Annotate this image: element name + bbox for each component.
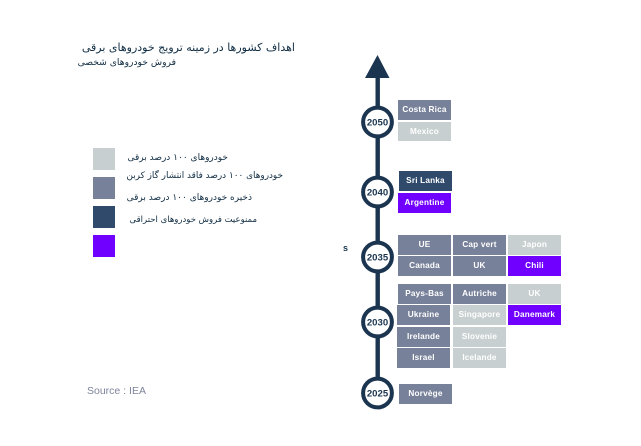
legend swatch: violet: [93, 235, 115, 257]
Ukraine: Ukraine: [408, 310, 439, 319]
Autriche: [453, 284, 506, 304]
milestone 2035: 2035: [367, 252, 389, 264]
Israel: [397, 348, 450, 368]
Israel: Israel: [412, 353, 435, 362]
milestone 2040: [363, 178, 392, 206]
Norvège: Norvège: [408, 389, 443, 398]
milestone 2030: 2030: [367, 318, 388, 328]
Mexico: [398, 122, 451, 141]
legend label: combustion sales ban: ممنوعیت فروش خودروهای احتراقی: [130, 215, 257, 225]
milestone 2035: [363, 243, 392, 271]
milestone 2050: 2050: [367, 118, 388, 128]
Argentine: [398, 193, 451, 213]
timeline: [361, 55, 394, 410]
Pays-Bas: [398, 284, 451, 304]
Slovenie: [453, 327, 506, 347]
country group 2035: [398, 235, 561, 276]
Singapore: [453, 305, 506, 325]
UK: UK: [528, 289, 541, 298]
Singapore: Singapore: [459, 310, 500, 319]
Ukraine: [397, 305, 450, 325]
legend label: 100% electric: خودروهای ۱۰۰ درصد برقی: [127, 153, 228, 163]
UE: UE: [419, 240, 430, 249]
UK: [453, 256, 506, 276]
UK: [508, 284, 561, 304]
milestone 2025: [363, 379, 392, 407]
Irelande: Irelande: [407, 332, 440, 341]
Chili: [508, 256, 561, 276]
legend label: fleet 100% electric: ذخیره خودروهای ۱۰۰ درصد برقی: [127, 193, 252, 203]
country group 2040: [398, 171, 452, 213]
Japon: Japon: [522, 240, 547, 249]
title: اهداف کشورها در زمینه ترویج خودروهای برقی: [82, 41, 295, 54]
Costa Rica: Costa Rica: [402, 105, 447, 114]
Canada: Canada: [409, 261, 440, 270]
country group 2030: [397, 284, 561, 368]
legend swatch: navy: [93, 206, 115, 228]
Cap vert: [453, 235, 506, 255]
country group 2050: [398, 100, 451, 141]
milestone 2040: 2040: [367, 188, 388, 198]
Danemark: [508, 305, 561, 325]
Icelande: [453, 348, 506, 368]
Chili: Chili: [525, 261, 544, 270]
legend swatch: light grey: [93, 148, 115, 170]
Sri Lanka: [399, 171, 452, 191]
timeline axis: [376, 75, 380, 393]
Danemark: Danemark: [514, 310, 555, 319]
milestone 2050: [363, 108, 392, 136]
legend swatch: grey: [93, 177, 115, 199]
Slovenie: Slovenie: [462, 332, 497, 341]
Argentine: Argentine: [404, 198, 444, 207]
Icelande: Icelande: [462, 353, 497, 362]
Autriche: Autriche: [462, 289, 497, 298]
Costa Rica: [398, 100, 451, 120]
Sri Lanka: Sri Lanka: [406, 176, 445, 185]
arrow head: [365, 55, 390, 78]
subtitle: فروش خودروهای شخصی: [78, 57, 176, 68]
UE: [398, 235, 451, 255]
Cap vert: Cap vert: [462, 240, 497, 249]
legend label: 100% zero emission: خودروهای ۱۰۰ درصد فاقد انتشار گاز کربن: [126, 171, 283, 181]
Japon: [508, 235, 561, 255]
Norvège: [399, 384, 452, 404]
UK: UK: [473, 261, 486, 270]
Pays-Bas: Pays-Bas: [405, 289, 444, 298]
Irelande: [397, 327, 450, 347]
Canada: [398, 256, 451, 276]
legend: [93, 148, 283, 257]
Mexico: Mexico: [410, 127, 439, 136]
milestone 2025: 2025: [367, 388, 389, 400]
source: Source : IEA: [87, 385, 146, 397]
milestone 2030: [363, 308, 392, 336]
stray letter: s: [343, 243, 348, 253]
